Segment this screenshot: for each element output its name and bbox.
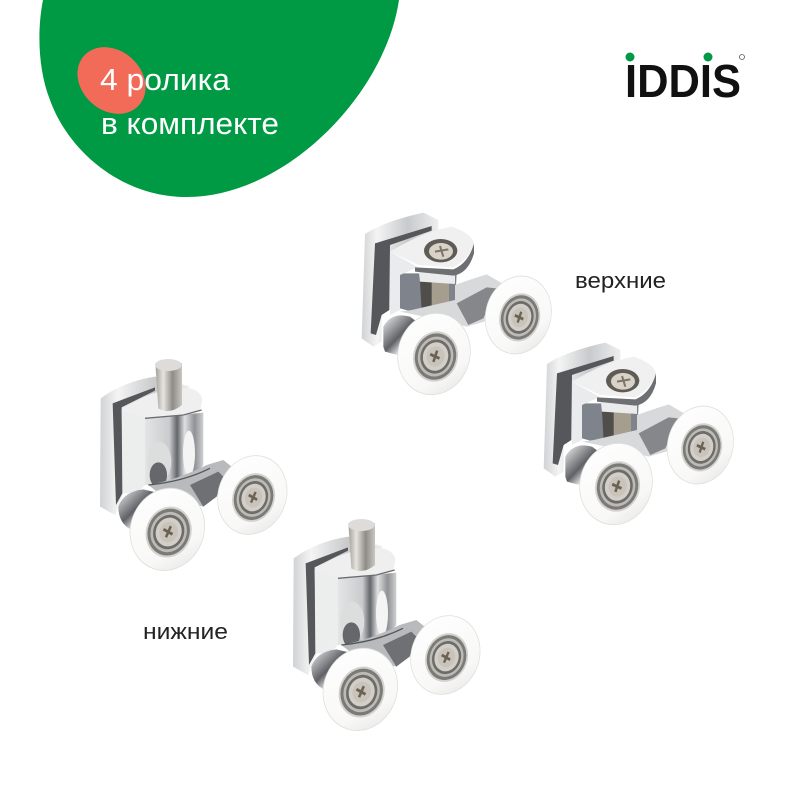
lower roller 2 [293, 519, 491, 741]
logo: IDDIS: IDDIS [625, 55, 741, 107]
lower roller 1 [100, 359, 298, 581]
upper roller 2 [544, 343, 742, 533]
green corner shape [39, 0, 399, 197]
coral accent blob [64, 33, 159, 128]
upper roller 1 [362, 213, 560, 403]
heading [100, 62, 279, 141]
label: upper rollers: верхние [575, 268, 666, 293]
heading: 4 ролика [100, 62, 231, 97]
label: lower rollers: нижние [143, 619, 228, 644]
heading: в комплекте [101, 106, 279, 141]
